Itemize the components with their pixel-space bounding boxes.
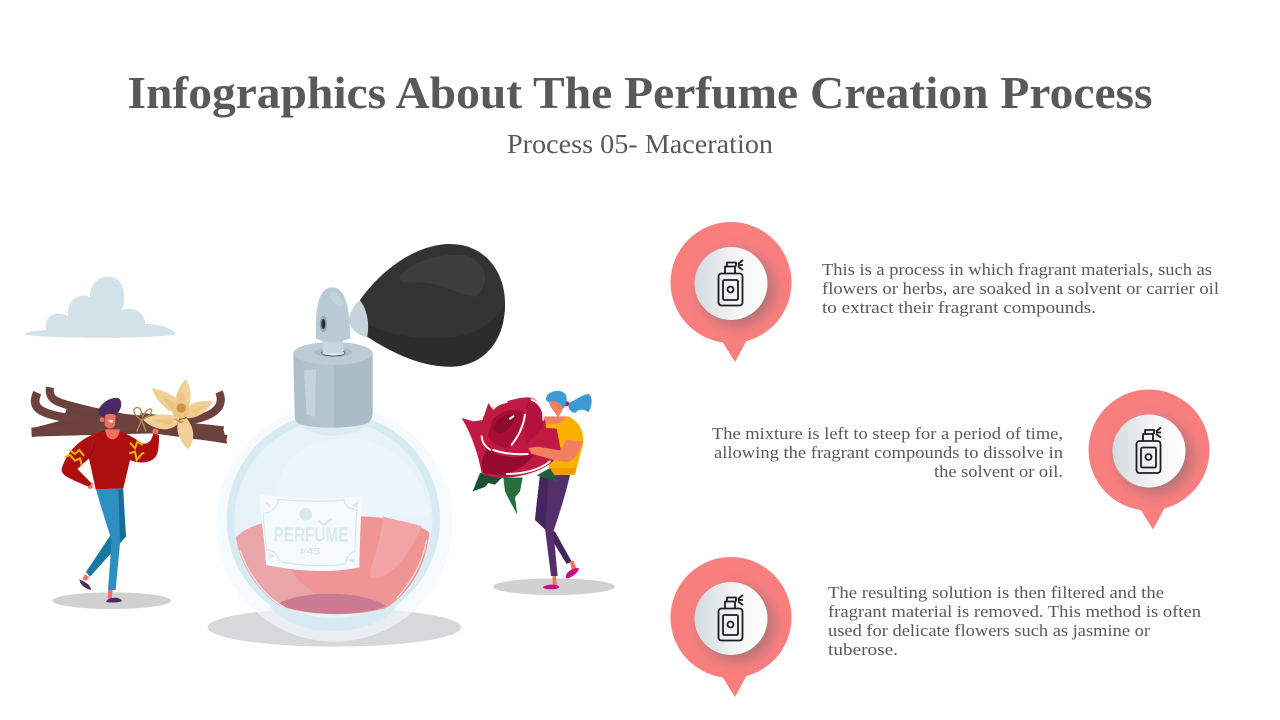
step 3: text <box>828 583 1201 659</box>
woman shadow <box>493 578 615 595</box>
bulb connector <box>348 301 368 337</box>
inner glass highlight <box>277 438 430 517</box>
glass rim lines <box>240 540 427 607</box>
step 3: pin icon <box>670 557 792 697</box>
step 3: text: tuberose. <box>828 640 898 659</box>
vanilla flower <box>143 379 213 449</box>
bottle shadow <box>208 608 461 647</box>
sleeve zigzag <box>65 442 144 466</box>
cap shadow on glass <box>295 417 372 436</box>
vanilla pods <box>32 387 227 443</box>
man shadow <box>52 592 171 609</box>
rose highlights <box>482 400 550 474</box>
subtitle: Process 05- Maceration <box>507 129 774 159</box>
step 2: text: The mixture is left to steep for a period of time, <box>712 424 1063 443</box>
front leg <box>535 475 570 576</box>
step 1: text: This is a process in which fragrant materials, such as <box>822 260 1212 279</box>
rose bloom <box>462 397 561 478</box>
yellow shirt <box>543 416 583 475</box>
glass base <box>270 607 397 631</box>
step 1: text: flowers or herbs, are soaked in a solvent or carrier oil <box>822 279 1219 298</box>
spray bulb <box>360 244 505 367</box>
back leg <box>545 528 572 564</box>
blue hair <box>546 391 567 409</box>
step 2: pin icon <box>1088 390 1210 530</box>
string bow <box>134 408 152 432</box>
title: Infographics About The Perfume Creation Process <box>128 67 1152 118</box>
icon: cloud <box>24 276 176 338</box>
hands <box>88 483 93 489</box>
face <box>548 398 564 417</box>
leaves <box>473 473 503 491</box>
illustration: woman legs <box>493 475 615 595</box>
step 1: text: to extract their fragrant compounds. <box>822 298 1096 317</box>
glass body <box>227 413 440 626</box>
metal collar <box>293 342 373 428</box>
illustration: perfume bottle <box>208 244 505 647</box>
step 2: text: the solvent or oil. <box>934 462 1063 481</box>
arm and hand <box>528 440 583 462</box>
left leg <box>86 533 120 577</box>
step 2: text: allowing the fragrant compounds to dissolve in <box>714 443 1063 462</box>
perfume label <box>260 495 363 571</box>
perfume liquid <box>236 516 429 614</box>
chest skin <box>545 416 567 424</box>
ponytail <box>568 394 592 413</box>
smile <box>107 420 114 423</box>
step 3: text: used for delicate flowers such as jasmine or <box>828 621 1151 640</box>
left hand <box>483 414 492 421</box>
perfume label: #45 <box>300 547 320 557</box>
icon: spray bottle <box>1136 428 1161 473</box>
right leg <box>96 488 126 590</box>
liquid left tint <box>236 519 323 605</box>
red sweater <box>62 431 159 489</box>
atomizer nozzle <box>316 287 350 342</box>
icon: spray bottle <box>718 595 743 640</box>
liquid sediment <box>278 594 386 614</box>
illustration: woman with rose <box>462 391 592 515</box>
perfume label: PERFUME <box>273 524 348 546</box>
head <box>105 413 116 429</box>
step 3: text: The resulting solution is then filtered and the <box>828 583 1164 602</box>
step 1: text <box>822 260 1219 317</box>
illustration: man carrying vanilla <box>32 379 227 609</box>
step 3: text: fragrant material is removed. This method is often <box>828 602 1201 621</box>
liquid highlight <box>370 517 422 578</box>
step 2: text <box>712 424 1063 481</box>
rose inner petals <box>488 410 525 448</box>
icon: spray bottle <box>718 260 743 306</box>
neck <box>105 429 120 439</box>
step 1: pin icon <box>670 222 792 362</box>
glass halo <box>216 405 453 642</box>
hair <box>98 398 121 417</box>
